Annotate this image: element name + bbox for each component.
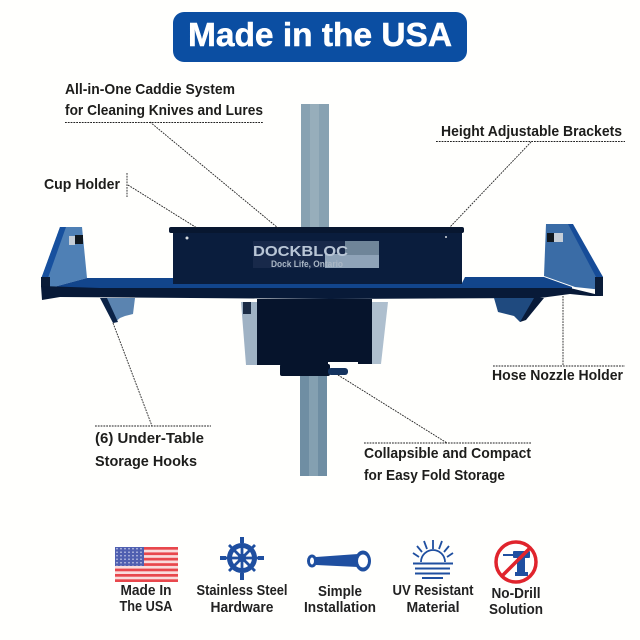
product: caddie table bbox=[41, 224, 603, 376]
label: caddie system bbox=[65, 81, 263, 119]
label: collapsible bbox=[364, 445, 531, 484]
icon: ship wheel bbox=[220, 537, 264, 580]
caption: stainless: Hardware bbox=[210, 599, 274, 616]
caption: no-drill: No-Drill bbox=[492, 585, 540, 602]
lower box bbox=[257, 299, 372, 365]
icon: US flag bbox=[115, 547, 178, 582]
caption: simple installation: Installation bbox=[304, 599, 376, 616]
label: caddie system: for Cleaning Knives and Lures bbox=[65, 102, 263, 119]
caption: uv resistant: UV Resistant bbox=[392, 582, 474, 599]
label: collapsible: for Easy Fold Storage bbox=[364, 467, 505, 484]
label: caddie system: All-in-One Caddie System bbox=[65, 81, 235, 98]
caption: simple installation: Simple bbox=[318, 583, 362, 600]
caddie box bbox=[173, 230, 462, 284]
collar and knob bbox=[280, 364, 330, 376]
caption: made in usa bbox=[120, 582, 173, 615]
label: hooks: Storage Hooks bbox=[95, 453, 197, 470]
right bracket bbox=[544, 224, 603, 296]
caption: made in usa: The USA bbox=[120, 598, 173, 615]
right hooks bbox=[494, 298, 540, 322]
logo plate: Dock Life, Ontario bbox=[271, 259, 343, 269]
title banner: Made in the USA bbox=[188, 16, 452, 53]
icon: sun over water bbox=[413, 540, 453, 578]
caption: uv resistant bbox=[392, 582, 474, 616]
caption: stainless bbox=[196, 582, 288, 616]
label: brackets: Height Adjustable Brackets bbox=[441, 123, 622, 140]
leader lines bbox=[65, 122, 625, 443]
product: pole bbox=[300, 104, 329, 476]
label: collapsible: Collapsible and Compact bbox=[364, 445, 531, 462]
icon: no drill bbox=[496, 542, 536, 582]
caption: uv resistant: Material bbox=[406, 599, 460, 616]
logo plate: DOCKBLOC bbox=[253, 243, 348, 260]
label: cup holder: Cup Holder bbox=[44, 176, 120, 193]
title banner bbox=[173, 12, 467, 62]
caption: simple installation bbox=[304, 583, 376, 616]
caption: stainless: Stainless Steel bbox=[196, 582, 288, 599]
label: hooks: (6) Under-Table bbox=[95, 430, 204, 447]
shelf edge bbox=[41, 286, 603, 300]
label: hooks bbox=[95, 430, 204, 470]
logo plate bbox=[253, 241, 379, 269]
label: hose nozzle: Hose Nozzle Holder bbox=[492, 367, 623, 384]
icon: wrench bbox=[307, 550, 371, 572]
caption: no-drill bbox=[489, 585, 543, 618]
left hooks bbox=[104, 298, 135, 323]
shelf top bbox=[50, 277, 572, 292]
caption: no-drill: Solution bbox=[489, 601, 543, 618]
left bracket bbox=[41, 227, 87, 288]
caption: made in usa: Made In bbox=[120, 582, 172, 599]
